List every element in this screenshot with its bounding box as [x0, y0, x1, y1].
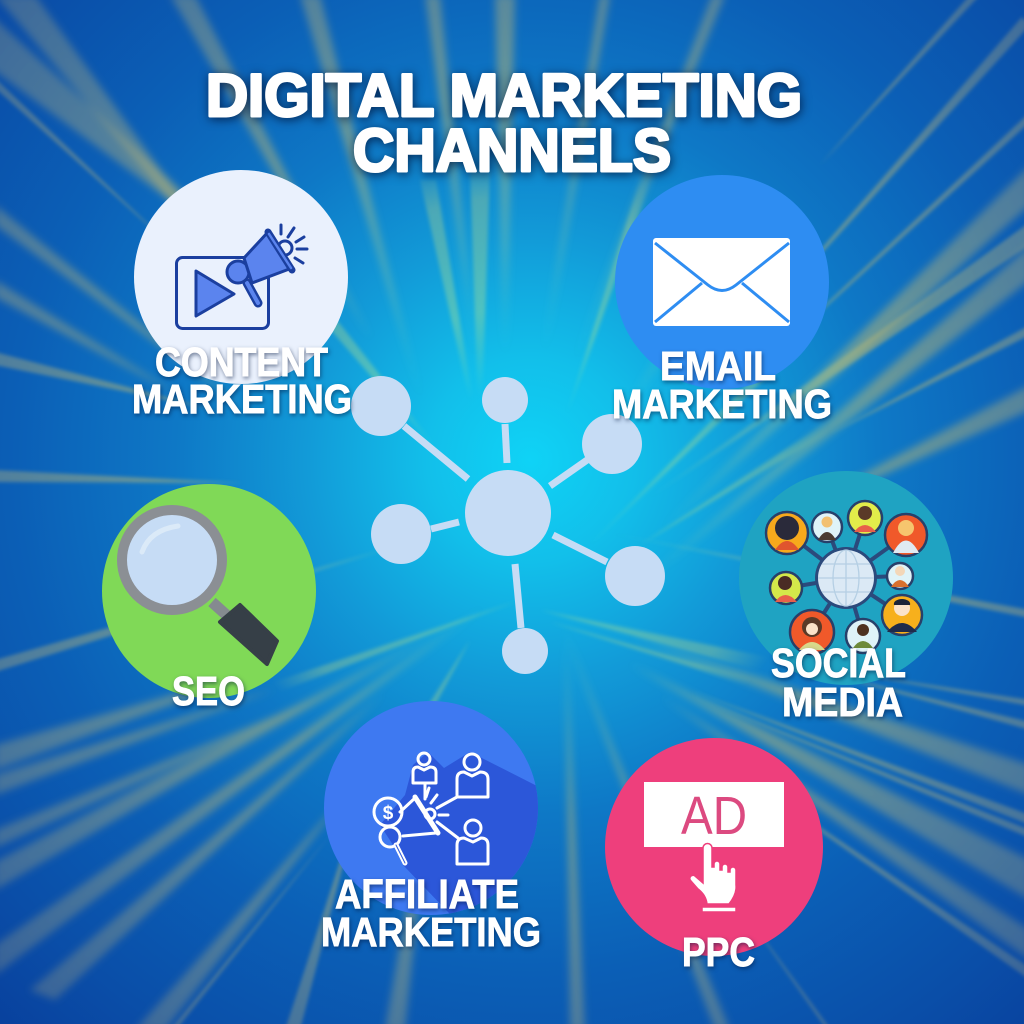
label: affiliate marketing: MARKETING: [321, 909, 541, 955]
panel: email marketing: [612, 175, 832, 427]
icon: video and megaphone: [176, 225, 307, 328]
label: social media: SOCIAL: [771, 640, 906, 686]
icon: affiliate megaphone and people: [374, 753, 488, 864]
title: CHANNELS: [353, 117, 671, 184]
panel: affiliate marketing: [321, 701, 545, 955]
title: DIGITAL MARKETING: [206, 62, 802, 129]
panel: seo: [102, 484, 316, 714]
panel: ppc: [605, 738, 823, 975]
dollar symbol: $: [383, 803, 394, 824]
label: ppc: PPC: [682, 929, 755, 975]
label: content marketing: MARKETING: [132, 376, 352, 422]
icon: envelope: [653, 238, 790, 326]
icon: ad banner: [644, 782, 784, 847]
label: affiliate marketing: AFFILIATE: [335, 871, 519, 917]
network hub diagram: [351, 376, 665, 674]
label: email marketing: EMAIL: [660, 343, 776, 389]
icon: magnifying glass: [122, 510, 277, 664]
label: social media: MEDIA: [782, 679, 903, 725]
icon: ad banner: AD: [681, 786, 747, 846]
icon: network of people: [766, 501, 927, 654]
label: seo: SEO: [172, 668, 245, 714]
label: content marketing: CONTENT: [155, 339, 328, 385]
panel: social media: [739, 471, 953, 725]
label: email marketing: MARKETING: [612, 381, 832, 427]
icon: pointing hand: [690, 844, 736, 912]
panel: content marketing: [132, 170, 352, 422]
